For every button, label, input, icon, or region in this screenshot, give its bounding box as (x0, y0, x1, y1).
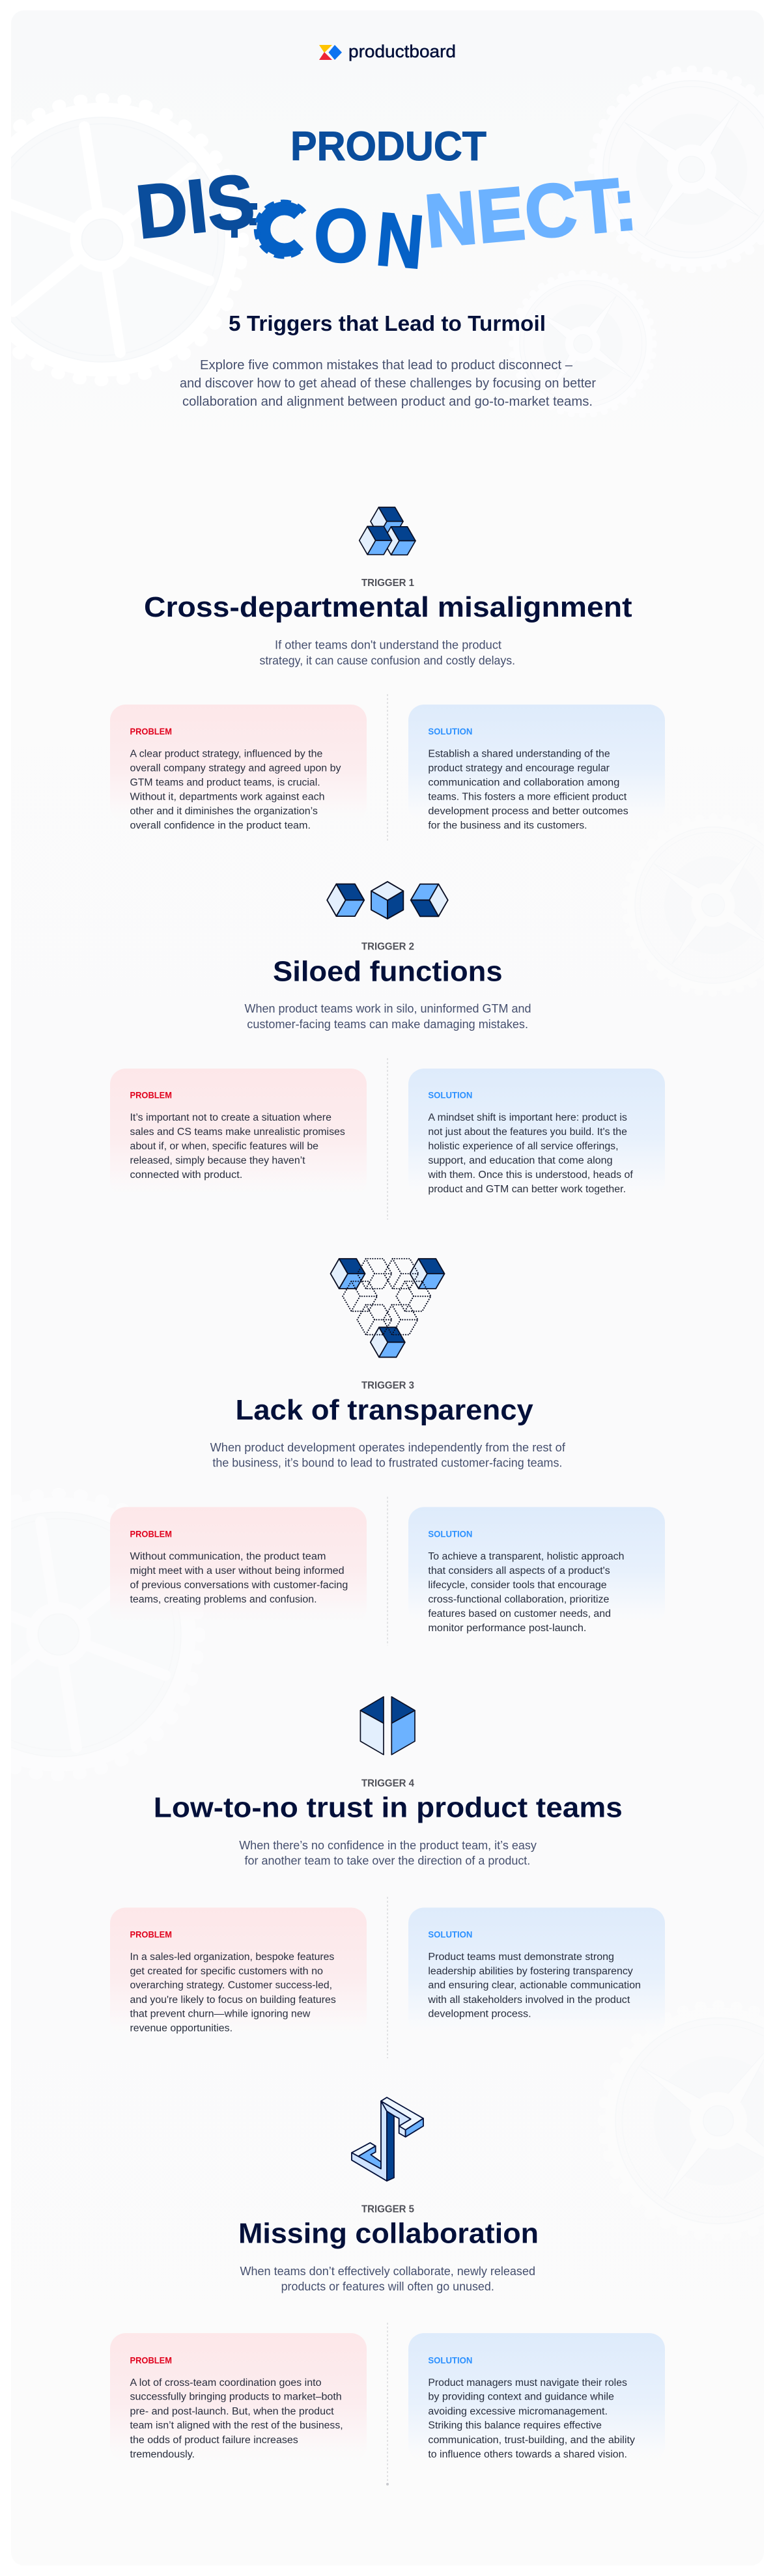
panel: solution: Striking this balance requires effective (428, 2420, 602, 2431)
panel: problem: that prevent churn—while ignoring new (130, 2009, 311, 2020)
description: the business, it’s bound to lead to frustrated customer-facing teams. (212, 1456, 562, 1470)
heading: Cross-departmental misalignment (144, 591, 632, 623)
trigger label: TRIGGER 3 (361, 1380, 414, 1391)
title: Product Disconnect: NECT: (421, 161, 640, 264)
panel: solution (408, 1507, 665, 1634)
panel: problem: A lot of cross-team coordination goes into (130, 2377, 322, 2388)
panel: problem: overall company strategy and agreed upon by (130, 763, 341, 774)
description (245, 1001, 531, 1031)
panel: solution: with them. Once this is understood, heads of (427, 1169, 633, 1181)
panel: solution: support, and education that come along (428, 1155, 613, 1166)
icon: impossible shape (352, 2097, 423, 2181)
panel: problem: other and it diminishes the organization’s (130, 805, 318, 817)
description: When product development operates independently from the rest of (210, 1440, 566, 1454)
panel: problem: PROBLEM (130, 1090, 172, 1100)
title: Product Disconnect: O (314, 193, 368, 278)
icon: split cube (360, 1697, 415, 1755)
panel: problem: It’s important not to create a situation where (130, 1112, 331, 1123)
panel: problem: PROBLEM (130, 1929, 172, 1939)
description (240, 2264, 535, 2293)
panel: solution: to influence others towards a shared vision. (428, 2449, 627, 2460)
panel: solution: and ensuring clear, actionable communication (428, 1980, 641, 1991)
panel: solution: A mindset shift is important here: product is (428, 1112, 627, 1123)
panel: problem: successfully bringing products to market–both (130, 2392, 342, 2403)
panel: problem: get created for specific customers with no (130, 1966, 323, 1977)
panel: solution (408, 1908, 665, 2036)
description: strategy, it can cause confusion and costly delays. (259, 654, 515, 667)
description: When teams don’t effectively collaborate, newly released (240, 2264, 535, 2278)
panel: solution: not just about the features you build. It's the (428, 1127, 627, 1138)
panel: solution (408, 2333, 665, 2461)
panel: solution: communication, trust-building, and the ability (428, 2435, 635, 2446)
section: trigger 3 (110, 1259, 665, 1645)
section: trigger 2 (110, 882, 665, 1220)
title: Product Disconnect: DIS (132, 158, 259, 255)
panel: problem: and you're likely to focus on building features (130, 1995, 336, 2006)
heading: Missing collaboration (238, 2218, 539, 2249)
panel: solution: avoiding excessive micromanagement. (428, 2406, 608, 2417)
panel: solution: development process. (428, 2009, 531, 2020)
panel: solution: To achieve a transparent, holistic approach (428, 1551, 624, 1562)
panel: problem: sales and CS teams make unrealistic promises (130, 1127, 345, 1138)
trigger label: TRIGGER 1 (361, 578, 414, 589)
panel: solution: SOLUTION (428, 1929, 472, 1939)
panel: solution: with all stakeholders involved in the product (427, 1995, 630, 2006)
panel: problem (110, 1069, 367, 1197)
panel: solution: SOLUTION (428, 1090, 472, 1100)
heading: Lack of transparency (236, 1394, 533, 1426)
panel: problem: Without it, departments work against each (130, 792, 325, 803)
panel: solution: Product managers must navigate their roles (428, 2377, 627, 2388)
panel: problem: overarching strategy. Customer success-led, (130, 1980, 332, 1991)
panel: solution: teams. This fosters a more efficient product (428, 792, 627, 803)
heading: Siloed functions (273, 956, 503, 988)
panel: problem: Without communication, the product team (130, 1551, 326, 1562)
panel: problem: PROBLEM (130, 2355, 172, 2366)
panel: problem: tremendously. (130, 2449, 195, 2460)
panel: problem (110, 1507, 367, 1624)
panel: solution: by providing context and guidance while (428, 2392, 614, 2403)
description: When there’s no confidence in the product team, it’s easy (239, 1838, 537, 1852)
panel: problem: PROBLEM (130, 726, 172, 736)
panel: solution: holistic experience of all service offerings, (428, 1141, 619, 1152)
title: Product Disconnect: PRODUCT (290, 124, 486, 169)
description (259, 638, 515, 667)
icon: gear letter C (257, 203, 304, 256)
icon: three linked cubes (359, 507, 416, 555)
panel: problem: A clear product strategy, influenced by the (130, 749, 322, 760)
subtitle: 5 Triggers that Lead to Turmoil (229, 311, 546, 335)
trigger label: TRIGGER 2 (361, 941, 414, 952)
panel: solution: development process and better outcomes (428, 805, 628, 817)
description: customer-facing teams can make damaging mistakes. (247, 1017, 528, 1031)
panel: problem: about if, or when, specific features will be (130, 1141, 318, 1152)
panel: solution (408, 705, 665, 831)
panel: problem: PROBLEM (130, 1529, 172, 1539)
trigger label: TRIGGER 4 (361, 1778, 414, 1789)
panel: solution: SOLUTION (428, 2355, 472, 2366)
title: Product Disconnect: N (373, 196, 427, 285)
panel: problem: GTM teams and product teams, is crucial. (130, 777, 320, 788)
panel: problem: In a sales-led organization, bespoke features (130, 1952, 335, 1963)
panel: problem (110, 705, 367, 831)
panel: solution: monitor performance post-launch. (428, 1623, 586, 1634)
panel: solution: Establish a shared understanding of the (428, 749, 610, 760)
section: trigger 4 (110, 1697, 665, 2058)
panel: problem: connected with product. (130, 1169, 242, 1181)
panel: solution: SOLUTION (428, 1529, 472, 1539)
panel: problem: the odds of product failure increases (130, 2435, 298, 2446)
panel: problem: of previous conversations with customer-facing (130, 1580, 348, 1591)
intro text (180, 357, 596, 409)
intro text: collaboration and alignment between product and go-to-market teams. (182, 394, 593, 409)
panel: solution: SOLUTION (428, 726, 472, 736)
description: for another team to take over the direction of a product. (245, 1853, 530, 1868)
panel: problem: released, simply because they haven’t (130, 1155, 305, 1166)
logo: productboard: productboard (348, 42, 456, 61)
description: If other teams don't understand the product (275, 638, 501, 651)
panel: solution: Product teams must demonstrate strong (428, 1952, 614, 1963)
panel: solution: communication and collaboration among (428, 777, 619, 788)
panel: solution: lifecycle, consider tools that encourage (428, 1580, 607, 1591)
intro text: and discover how to get ahead of these challenges by focusing on better (180, 376, 596, 391)
panel: solution (408, 1069, 665, 1197)
panel: problem: might meet with a user without being informed (130, 1565, 345, 1576)
description: products or features will often go unused. (281, 2280, 494, 2293)
description (210, 1440, 566, 1470)
panel: solution: product strategy and encourage regular (428, 763, 610, 774)
title: Product Disconnect (132, 124, 640, 285)
icon: cubes with dotted outlines (331, 1259, 444, 1357)
panel: solution: product and GTM can better work together. (428, 1184, 626, 1195)
panel: solution: for the business and its customers. (428, 820, 587, 831)
icon: three separate cubes (327, 882, 448, 919)
section: trigger 1 (110, 507, 665, 843)
panel: problem: revenue opportunities. (130, 2023, 232, 2034)
description: When product teams work in silo, uninformed GTM and (245, 1001, 531, 1015)
panel: problem (110, 2333, 367, 2461)
panel: solution: leadership abilities by fostering transparency (428, 1966, 633, 1977)
trigger label: TRIGGER 5 (361, 2204, 414, 2215)
panel: problem (110, 1908, 367, 2036)
description (239, 1838, 537, 1868)
panel: solution: cross-functional collaboration, prioritize (428, 1594, 610, 1605)
panel: problem: team isn’t aligned with the rest of the business, (130, 2420, 343, 2431)
intro text: Explore five common mistakes that lead to product disconnect – (200, 357, 573, 372)
section: trigger 5 (110, 2097, 665, 2485)
heading: Low-to-no trust in product teams (154, 1791, 623, 1823)
panel: problem: teams, creating problems and confusion. (130, 1594, 317, 1605)
panel: problem: overall confidence in the product team. (130, 820, 311, 831)
panel: solution: features based on customer needs, and (428, 1608, 611, 1619)
panel: solution: that considers all aspects of a product's (428, 1565, 610, 1576)
panel: problem: pre- and post-launch. But, when the product (130, 2406, 334, 2417)
